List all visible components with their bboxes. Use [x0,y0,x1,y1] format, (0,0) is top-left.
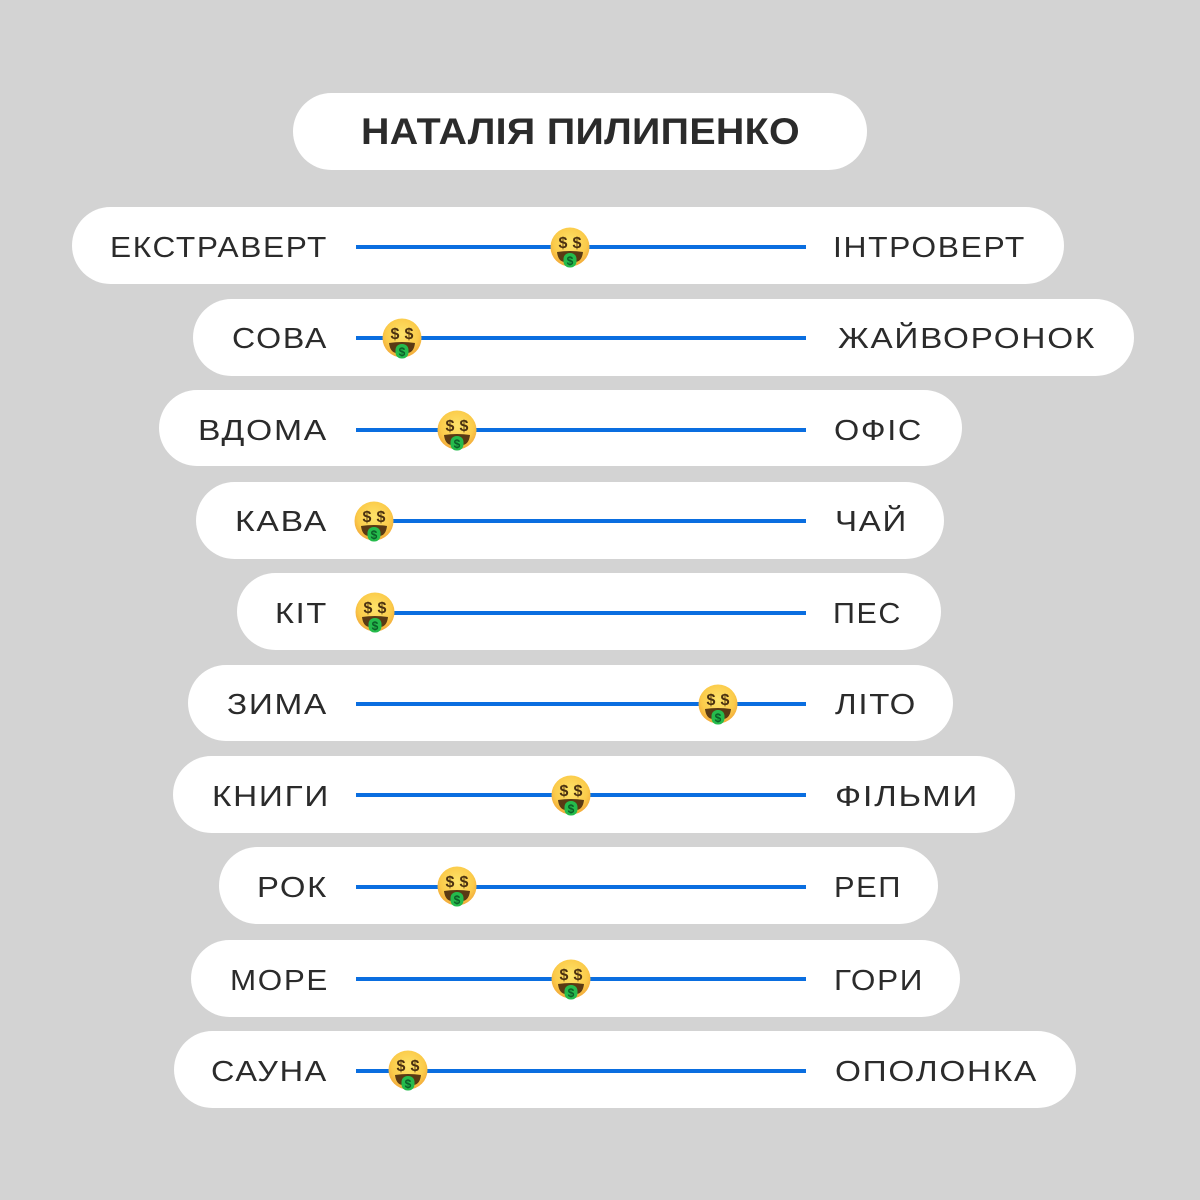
row: зима / літо: ЗИМА [227,689,328,721]
icon: money-mouth face: $ [707,692,716,709]
icon: money-mouth face: $ [715,711,722,725]
icon: money-mouth face: $ [446,874,455,891]
icon: money-mouth face [382,318,422,359]
icon: money-mouth face [552,776,590,816]
icon: money-mouth face [388,1050,428,1091]
icon: money-mouth face: $ [372,619,379,633]
icon: money-mouth face: $ [560,783,569,800]
row: книги / фільми: ФІЛЬМИ [835,781,979,813]
icon: money-mouth face: $ [568,986,575,1000]
row: кава / чай [196,482,944,559]
icon: money-mouth face [356,592,394,633]
icon: money-mouth face: $ [560,967,569,984]
icon: money-mouth face: $ [454,437,461,451]
row: сова / жайворонок: СОВА [232,323,328,355]
row: кіт / пес: ПЕС [833,598,902,630]
icon: money-mouth face [438,410,476,451]
row: рок / реп: РЕП [834,872,902,904]
icon: money-mouth face: $ [567,254,574,268]
row: книги / фільми: КНИГИ [212,781,330,813]
icon: money-mouth face: $ [405,326,414,343]
icon: money-mouth face [550,228,590,268]
row: вдома / офіс: ВДОМА [198,415,328,447]
icon: money-mouth face: $ [371,528,378,542]
icon: money-mouth face: $ [378,600,387,617]
icon: money-mouth face: $ [391,326,400,343]
row: кава / чай: КАВА [235,506,328,538]
row: вдома / офіс [159,390,962,466]
row: сауна / ополонка: САУНА [211,1056,328,1088]
row: кіт / пес: КІТ [275,598,328,630]
icon: money-mouth face: $ [454,893,461,907]
icon: money-mouth face: $ [574,967,583,984]
row: зима / літо: ЛІТО [835,689,917,721]
row: сауна / ополонка: ОПОЛОНКА [835,1056,1038,1088]
row: рок / реп: РОК [257,872,328,904]
row: екстраверт / інтроверт: ЕКСТРАВЕРТ [110,232,328,264]
row: море / гори [191,940,960,1017]
title pill [293,93,867,170]
icon: money-mouth face: $ [574,783,583,800]
row: море / гори: МОРЕ [230,965,329,997]
row: рок / реп [219,847,938,924]
row: кава / чай: ЧАЙ [835,504,908,538]
row: книги / фільми [173,756,1015,833]
icon: money-mouth face: $ [363,509,372,526]
icon: money-mouth face [354,502,394,542]
icon: money-mouth face: $ [559,235,568,252]
row: екстраверт / інтроверт [72,207,1064,284]
icon: money-mouth face: $ [405,1077,412,1091]
icon: money-mouth face [552,960,590,1000]
row: кіт / пес [237,573,941,650]
icon: money-mouth face: $ [446,418,455,435]
row: море / гори: ГОРИ [834,965,924,997]
icon: money-mouth face: $ [411,1058,420,1075]
icon: money-mouth face: $ [397,1058,406,1075]
icon: money-mouth face [698,684,738,725]
icon: money-mouth face: $ [460,418,469,435]
row: сова / жайворонок: ЖАЙВОРОНОК [838,321,1096,355]
icon: money-mouth face: $ [460,874,469,891]
row: вдома / офіс: ОФІС [834,415,923,447]
row: сова / жайворонок [193,299,1134,376]
title: НАТАЛІЯ ПИЛИПЕНКО [361,111,800,152]
icon: money-mouth face [438,866,476,907]
icon: money-mouth face: $ [377,509,386,526]
row: екстраверт / інтроверт: ІНТРОВЕРТ [833,232,1026,264]
icon: money-mouth face: $ [568,802,575,816]
icon: money-mouth face: $ [399,345,406,359]
icon: money-mouth face: $ [573,235,582,252]
row: зима / літо [188,665,953,741]
icon: money-mouth face: $ [721,692,730,709]
icon: money-mouth face: $ [364,600,373,617]
row: сауна / ополонка [174,1031,1076,1108]
